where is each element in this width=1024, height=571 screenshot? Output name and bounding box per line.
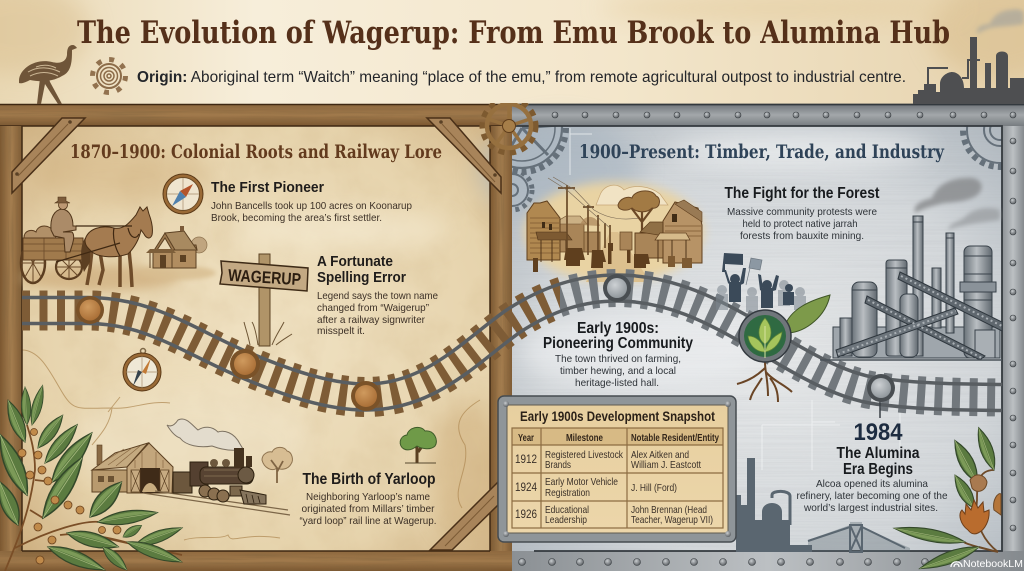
road xyxy=(586,232,650,282)
illustration: steam locomotive with smoke xyxy=(143,419,290,515)
table row 1926: 1926 xyxy=(515,507,537,521)
left building xyxy=(527,201,572,262)
table row 1926: Leadership xyxy=(545,514,587,526)
table header row: Milestone xyxy=(566,432,603,444)
poles and wires xyxy=(558,185,610,255)
icon: bronze gear joining the panels xyxy=(483,100,535,152)
table row 1924: 1924 xyxy=(515,480,537,494)
text: The Birth of Yarloop: The Birth of Yarloop xyxy=(302,471,436,488)
table row 1924: Early Motor Vehicle xyxy=(545,476,618,488)
table row 1912: Alex Aitken and xyxy=(631,449,689,461)
text: 1984 The Alumina Era Begins: world’s largest industrial sites. xyxy=(803,502,938,514)
illustration: bottom industrial silhouette xyxy=(736,458,910,552)
text: Early 1900s Pioneering Community xyxy=(543,320,693,389)
illustration: gum blossom lower right xyxy=(893,426,1001,571)
illustration: Wagerup signpost xyxy=(220,254,308,346)
railway track xyxy=(22,269,1002,417)
table row 1912: William J. Eastcott xyxy=(631,459,701,471)
text: A Fortunate Spelling Error: misspelt it. xyxy=(317,325,365,337)
wagons and people xyxy=(533,243,692,272)
table title: Early 1900s Development Snapshot xyxy=(520,408,715,424)
illustration: alumina refinery xyxy=(820,178,1002,360)
icon: green tree xyxy=(400,427,436,463)
text: Early 1900s Pioneering Community: Early 1900s: xyxy=(577,320,659,337)
text: The Birth of Yarloop: “yard loop” rail line at Wagerup. xyxy=(300,515,436,527)
table row 1912: 1912 xyxy=(515,452,537,466)
text: 1984 The Alumina Era Begins: 1984 xyxy=(854,419,903,446)
table: Early 1900s Development Snapshot xyxy=(498,396,736,542)
origin statement: Origin: Aboriginal term “Waitch” meaning “place of the emu,” from remote agricultural outpost to industrial centre. xyxy=(137,69,906,86)
illustration: gum branch lower left xyxy=(0,384,184,571)
header parchment band xyxy=(0,0,1024,106)
horse xyxy=(56,207,152,287)
illustration: horse, cart and driver xyxy=(20,197,180,291)
text: The Birth of Yarloop: originated from Millars’ timber xyxy=(302,503,435,515)
track rails xyxy=(22,273,1002,412)
text: A Fortunate Spelling Error: Spelling Error xyxy=(317,269,406,286)
text: The Fight for the Forest: The Fight for the Forest xyxy=(724,185,880,202)
table row 1924: Registration xyxy=(545,487,590,499)
left panel background: aged parchment xyxy=(0,104,512,571)
illustration: protest crowd xyxy=(716,253,806,312)
icon: aboriginal dot circle xyxy=(92,60,126,92)
table row 1924: J. Hill (Ford) xyxy=(631,482,677,494)
gears: grey background gears xyxy=(512,126,1002,212)
logo: NotebookLM: NotebookLM xyxy=(963,558,1023,570)
text: The First Pioneer xyxy=(211,179,412,224)
table row 1912: Brands xyxy=(545,459,571,471)
text: Early 1900s Pioneering Community: heritage-listed hall. xyxy=(575,377,659,389)
wooden frame: left panel xyxy=(0,104,512,571)
right panel background: brushed metal xyxy=(480,104,1024,571)
heading: left panel: 1870–1900: Colonial Roots and Railway Lore xyxy=(70,141,442,163)
text: 1984 The Alumina Era Begins: Alcoa opened its alumina xyxy=(816,478,928,490)
icon: sepia tree xyxy=(262,447,292,483)
text: 1984 The Alumina Era Begins: Era Begins xyxy=(843,461,913,478)
metal frame: right panel xyxy=(512,104,1024,571)
icon: emu silhouette xyxy=(19,45,77,104)
far buildings xyxy=(558,222,632,252)
illustration: Wagerup signpost: WAGERUP xyxy=(228,266,302,289)
milestone node xyxy=(76,296,104,324)
text: 1984 The Alumina Era Begins: refinery, later becoming one of the xyxy=(796,490,948,502)
illustration: pioneer town vignette xyxy=(524,177,704,282)
milestone node: steel xyxy=(603,274,631,302)
text: The Fight for the Forest: forests from bauxite mining. xyxy=(740,230,864,242)
refinery conveyors xyxy=(836,272,1002,360)
driver xyxy=(51,197,76,252)
text: Early 1900s Pioneering Community: The town thrived on farming, xyxy=(555,353,681,365)
illustration: timber mill barn xyxy=(92,443,173,493)
text: The First Pioneer: The First Pioneer xyxy=(211,179,324,196)
gum tree xyxy=(618,191,659,234)
text: A Fortunate Spelling Error: changed from “Waigerup” xyxy=(317,302,429,314)
text: A Fortunate Spelling Error: Legend says the town name xyxy=(317,290,438,302)
text: The Birth of Yarloop xyxy=(300,471,436,527)
table row 1926: Educational xyxy=(545,504,589,516)
milestone node xyxy=(351,381,381,411)
table header row xyxy=(512,428,723,445)
icon: second compass xyxy=(123,348,161,391)
cart bed and load xyxy=(23,226,83,260)
table header row: Notable Resident/Entity xyxy=(631,432,719,444)
table row 1912: Registered Livestock xyxy=(545,449,624,461)
text: The First Pioneer: Brook, becoming the area’s first settler. xyxy=(211,212,382,224)
text: The Fight for the Forest xyxy=(724,185,880,242)
text: A Fortunate Spelling Error: A Fortunate xyxy=(317,253,393,270)
table row 1926: John Brennan (Head xyxy=(631,504,707,516)
table row 1924 xyxy=(515,476,677,499)
illustration: settler's cottage xyxy=(140,226,216,280)
milestone node xyxy=(230,349,260,379)
icon: compass beside first pioneer xyxy=(163,174,203,214)
right buildings xyxy=(635,200,702,263)
milestone node: 1984 xyxy=(867,374,895,418)
text: 1984 The Alumina Era Begins: The Alumina xyxy=(836,445,920,462)
text: The Fight for the Forest: Massive community protests were xyxy=(727,206,877,218)
cart wheels xyxy=(21,243,82,283)
table row 1926: Teacher, Wagerup VII) xyxy=(631,514,713,526)
table row 1912 xyxy=(515,449,701,471)
table row 1926 xyxy=(515,504,713,526)
icon: refinery silhouette in header xyxy=(913,9,1024,104)
text: The Birth of Yarloop: Neighboring Yarloop’s name xyxy=(306,491,430,503)
text: Early 1900s Pioneering Community: Pioneering Community xyxy=(543,335,693,352)
text: The First Pioneer: John Bancells took up 100 acres on Koonarup xyxy=(211,200,412,212)
table header row: Year xyxy=(518,432,534,444)
heading: right panel: 1900–Present: Timber, Trade, and Industry xyxy=(579,141,945,163)
illustration: leaf, roots and seedling badge xyxy=(737,295,830,402)
text: A Fortunate Spelling Error: after a railway signwriter xyxy=(317,314,425,326)
text: The Fight for the Forest: held to protect native jarrah xyxy=(742,218,858,230)
text: 1984 The Alumina Era Begins xyxy=(796,419,948,514)
text: A Fortunate Spelling Error xyxy=(317,253,438,337)
track sleepers: steel section xyxy=(560,269,996,416)
text: Early 1900s Pioneering Community: timber hewing, and a local xyxy=(560,365,676,377)
track sleepers: timber section xyxy=(22,277,560,417)
